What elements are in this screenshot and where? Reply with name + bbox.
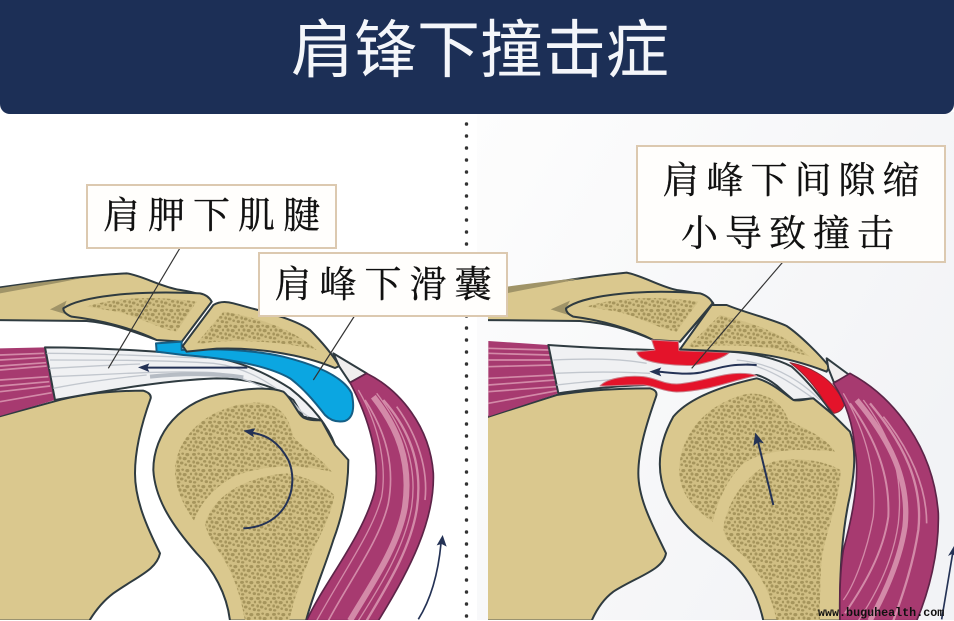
rotation arrow: [243, 428, 292, 528]
muscle: subscapularis: [0, 347, 55, 416]
acromion tendon tip: [827, 358, 849, 383]
label: subscapularis tendon: [86, 184, 337, 249]
deltoid muscle: [307, 373, 433, 621]
acromion: [183, 302, 339, 368]
deltoid muscle: [833, 373, 938, 621]
lower arrow: [942, 546, 954, 619]
tendon arrow: [138, 363, 247, 372]
acromion: [680, 305, 829, 372]
head arrow: [753, 433, 773, 505]
right panel: impingement: [480, 263, 954, 621]
muscle: [488, 341, 558, 417]
clavicle bone end: [566, 292, 713, 342]
label: subacromial bursa: [258, 252, 508, 317]
clavicle: [480, 273, 713, 342]
label: narrowed subacromial space: [636, 145, 946, 263]
label: narrowed subacromial space: 小导致撞击: [681, 214, 901, 255]
tendon: [548, 345, 833, 415]
leader lines: [108, 248, 358, 380]
tendon: [45, 347, 335, 445]
acromion tendon tip: [333, 353, 367, 383]
tendon arrow: [649, 365, 757, 376]
red inflamed bursa: lower: [600, 373, 757, 392]
scapula: [480, 388, 666, 621]
clavicle bone end: [63, 292, 212, 342]
red inflamed bursa: right: [790, 363, 845, 413]
bursa: blue: [156, 342, 353, 422]
humerus: [153, 389, 348, 621]
leader line: [692, 263, 782, 368]
dotted divider: [465, 124, 468, 620]
red inflamed bursa: top: [637, 340, 729, 365]
text: 肩锋下撞击症: [291, 16, 669, 86]
label: subscapularis tendon: 肩胛下肌腱: [103, 196, 328, 237]
lower arrow: [418, 535, 447, 619]
label: subacromial bursa: 肩峰下滑囊: [274, 265, 500, 306]
watermark: www.buguhealth.com: [818, 606, 944, 620]
label: narrowed subacromial space: 肩峰下间隙缩: [662, 161, 926, 202]
left panel: normal shoulder: [0, 248, 447, 621]
humerus: [660, 378, 854, 621]
scapula: [0, 391, 160, 621]
clavicle: [0, 273, 212, 342]
